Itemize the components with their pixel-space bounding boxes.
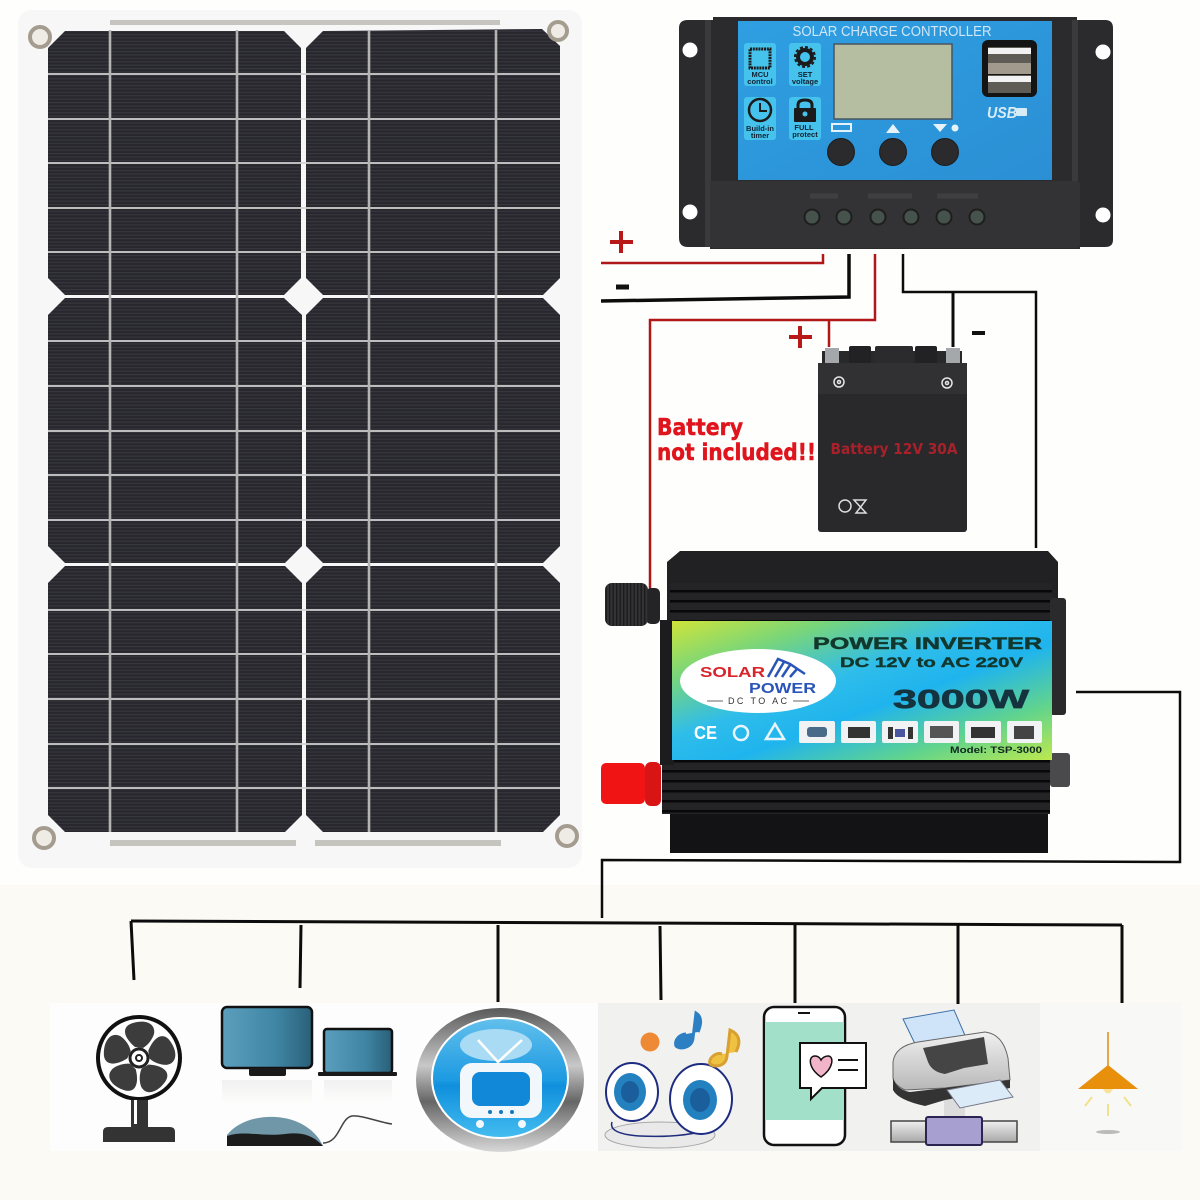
blue faceplate xyxy=(738,21,1052,180)
tile: Build-in timer: Build-in xyxy=(746,124,774,133)
housing flange ridges xyxy=(708,20,1075,247)
battery upper band xyxy=(818,363,967,394)
tile: FULL protect xyxy=(789,97,821,140)
grommets xyxy=(30,22,577,848)
fan blades xyxy=(100,1022,178,1096)
icon: ceiling lamp xyxy=(1078,1032,1138,1134)
CE mark: CE xyxy=(694,723,717,743)
black terminal xyxy=(605,583,660,626)
terminal screws xyxy=(804,210,984,224)
icon: TV xyxy=(416,1008,584,1152)
terminal block xyxy=(710,181,1080,248)
inverter right tabs xyxy=(1050,598,1070,787)
inverter upper heat sink ribs xyxy=(670,583,1052,621)
appliance thumbnails xyxy=(799,721,1042,743)
tile: MCU control: control xyxy=(747,77,773,86)
battery body xyxy=(818,363,967,532)
battery not included note: Battery xyxy=(657,415,743,441)
polarity sign: panel minus xyxy=(616,284,629,290)
inverter wattage: 3000W xyxy=(893,684,1030,714)
logo rules xyxy=(707,700,809,702)
inverter spec: DC 12V to AC 220V xyxy=(840,654,1024,670)
wires: controller to panel xyxy=(601,254,849,301)
TV highlight xyxy=(460,1029,532,1061)
icon: speakers and music notes xyxy=(605,1013,739,1148)
background lower band xyxy=(0,885,1200,1200)
tile: MCU control: MCU xyxy=(751,70,769,79)
controller title: SOLAR CHARGE CONTROLLER xyxy=(792,24,992,40)
tile: FULL protect: protect xyxy=(792,130,818,139)
battery top and terminals xyxy=(822,346,962,364)
wires: inverter output to bus xyxy=(602,692,1180,918)
USB ports xyxy=(982,40,1037,97)
wires: controller to battery and inverter xyxy=(650,254,1036,600)
logo SOLAR: SOLAR xyxy=(700,664,765,681)
USB battery glyph xyxy=(1016,108,1027,116)
recycle marks xyxy=(734,724,784,740)
icon: phone message xyxy=(764,1007,866,1145)
inverter left body xyxy=(660,620,674,765)
USB label: USB xyxy=(987,105,1017,122)
tile: SET voltage: voltage xyxy=(792,77,818,86)
LCD screen xyxy=(834,44,952,119)
battery screws xyxy=(834,377,952,388)
icon: laptop xyxy=(318,1029,397,1102)
battery not included note: not included!! xyxy=(657,440,816,466)
logo ellipse xyxy=(680,649,836,713)
inverter upper casing xyxy=(667,551,1058,625)
button icons xyxy=(831,123,958,133)
icon: monitor xyxy=(222,1007,312,1104)
tile: Build-in timer xyxy=(744,97,776,140)
logo POWER: POWER xyxy=(749,680,816,697)
battery recycling marks xyxy=(839,500,866,513)
solar panel xyxy=(18,10,582,868)
inverter heading: POWER INVERTER xyxy=(813,635,1042,653)
logo sun and panel xyxy=(768,659,805,677)
tile: SET voltage xyxy=(789,43,821,86)
top and bottom bus strips xyxy=(110,20,501,846)
terminal embossed symbols xyxy=(810,194,978,198)
inverter label xyxy=(672,621,1052,760)
buttons xyxy=(828,138,958,166)
model number: Model: TSP-3000 xyxy=(950,745,1042,755)
power inverter xyxy=(601,551,1070,853)
mounting holes xyxy=(682,42,1110,222)
polarity sign: battery minus xyxy=(972,331,985,335)
tile: FULL protect: FULL xyxy=(794,123,814,132)
polarity sign: battery plus xyxy=(789,326,812,348)
tile: SET voltage: SET xyxy=(798,70,813,79)
tile: Build-in timer: timer xyxy=(751,131,769,140)
icon: network printer xyxy=(891,1010,1017,1145)
inverter lower heat sink xyxy=(662,758,1050,814)
inverter foot xyxy=(670,812,1048,853)
device tile backgrounds xyxy=(50,1003,1182,1151)
logo subtitle: DC TO AC xyxy=(728,696,788,706)
tile: MCU control xyxy=(744,43,776,86)
wires: load distribution bus xyxy=(131,921,1122,1004)
red terminal xyxy=(601,762,661,806)
icon: fan xyxy=(98,1017,180,1142)
polarity sign: panel plus xyxy=(610,231,633,253)
battery xyxy=(818,346,967,532)
icon: mouse xyxy=(227,1116,392,1146)
horizontal grid lines xyxy=(48,74,560,788)
solar charge controller xyxy=(679,17,1113,249)
solar cells xyxy=(48,29,560,832)
controller housing xyxy=(679,17,1113,249)
battery label: Battery 12V 30A xyxy=(830,440,958,458)
vertical busbars xyxy=(110,30,496,832)
